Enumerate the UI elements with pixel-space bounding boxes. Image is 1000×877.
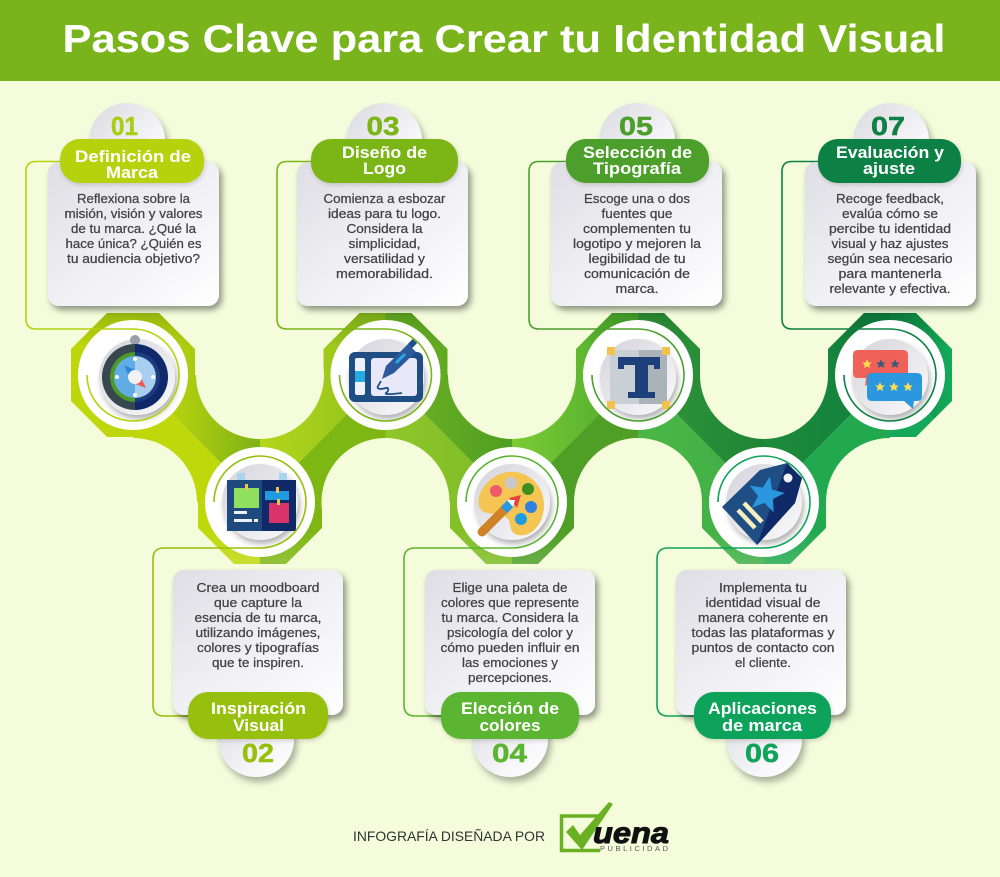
description text: Elige una paleta de (452, 581, 568, 595)
icon: rating chat bubbles (853, 350, 922, 409)
step title pill (566, 139, 709, 183)
number badge (173, 570, 343, 777)
step title pill (441, 692, 579, 739)
description text (64, 192, 202, 266)
description text: legibilidad de tu (588, 252, 686, 266)
description text: tu marca. Considera la (442, 611, 579, 625)
connector line (529, 162, 684, 421)
number badge: 06 (745, 740, 779, 768)
number badge (853, 103, 929, 179)
step title pill: ajuste (863, 160, 915, 178)
step title pill: Marca (106, 164, 159, 182)
description text: relevante y efectiva. (830, 282, 950, 296)
number badge: 02 (242, 740, 274, 768)
number badge (676, 570, 846, 777)
step title pill (188, 692, 328, 739)
step title pill: Tipografía (593, 160, 682, 178)
description text: memorabilidad. (336, 267, 433, 281)
description text: identidad visual de (706, 596, 821, 610)
logo: Buena Publicidad (562, 802, 669, 853)
description text: logotipo y mejoren la (573, 237, 701, 251)
step 03 (277, 103, 468, 430)
description text: visual y haz ajustes (832, 237, 948, 251)
description text: ideas para tu logo. (328, 207, 441, 221)
connector line (26, 162, 179, 421)
icon: brand tag (722, 463, 802, 545)
description text: comunicación de (584, 267, 690, 281)
card (676, 570, 846, 715)
description text: evalúa cómo se (842, 207, 938, 221)
connector line (277, 162, 432, 421)
card (805, 162, 976, 306)
description text (828, 192, 953, 296)
number badge (89, 103, 165, 179)
step 05 (529, 103, 722, 430)
step title pill (818, 139, 961, 183)
number badge (599, 103, 675, 179)
description text: versatilidad y (344, 252, 426, 266)
description text: manera coherente en (698, 611, 828, 625)
step title pill (60, 139, 204, 183)
step title pill: Visual (233, 717, 284, 735)
logo: Buena Publicidad: uena (593, 817, 669, 850)
description text (573, 192, 701, 296)
description text (440, 581, 580, 685)
connector line (404, 456, 558, 716)
number badge: 01 (111, 113, 138, 141)
description text (692, 581, 835, 670)
description text: Escoge una o dos (584, 192, 690, 206)
description text: para mantenerla (838, 267, 942, 281)
description text: tu audiencia objetivo? (67, 252, 200, 266)
icon: moodboard (227, 473, 296, 531)
number badge: 05 (619, 113, 653, 141)
description text (324, 192, 446, 281)
step title pill (311, 139, 458, 183)
connector line (782, 162, 936, 421)
description text: de tu marca. ¿Qué la (71, 222, 196, 236)
ribbon connecting the steps (60, 300, 960, 570)
description text: hace única? ¿Quién es (66, 237, 202, 251)
description text: percibe tu identidad (829, 222, 951, 236)
card (551, 162, 722, 306)
logo: Buena Publicidad: PUBLICIDAD (600, 844, 669, 853)
description text: complementen tu (583, 222, 691, 236)
icon: drawing tablet (349, 341, 423, 402)
description text: Recoge feedback, (836, 192, 944, 206)
description text: psicología del color y (447, 626, 574, 640)
number badge (346, 103, 422, 179)
description text: Considera la (346, 222, 423, 236)
description text: Reflexiona sobre la (77, 192, 190, 206)
step 01 (26, 103, 219, 430)
card (425, 570, 595, 715)
icon: typography T (607, 347, 670, 409)
card (48, 162, 219, 306)
card (173, 570, 343, 715)
step 06 (657, 447, 846, 777)
number badge: 03 (366, 113, 400, 141)
description text: esencia de tu marca, (194, 611, 322, 625)
description text: utilizando imágenes, (196, 626, 320, 640)
card (297, 162, 468, 306)
description text: según sea necesario (828, 252, 953, 266)
number badge: 07 (871, 113, 905, 141)
connector line (153, 456, 306, 716)
description text: colores que represente (441, 596, 579, 610)
description text: que te inspiren. (212, 656, 304, 670)
step title pill: Evaluación y (836, 144, 945, 162)
step title pill: Diseño de (342, 144, 427, 162)
step title pill: Definición de (75, 148, 191, 166)
description text: simplicidad, (348, 237, 420, 251)
step title pill (694, 692, 831, 739)
connector line (657, 456, 810, 716)
step title pill: de marca (722, 717, 803, 735)
icon: colour palette (478, 472, 544, 535)
description text: que capture la (214, 596, 302, 610)
description text: misión, visión y valores (64, 207, 202, 221)
description text: Comienza a esbozar (324, 192, 446, 206)
icon: compass (102, 335, 168, 410)
number badge: 04 (492, 740, 528, 768)
description text: fuentes que (602, 207, 673, 221)
description text (194, 581, 322, 670)
footer credit (353, 802, 669, 853)
description text: puntos de contacto con (692, 641, 835, 655)
description text: Implementa tu (719, 581, 807, 595)
step 02 (153, 447, 343, 777)
description text: el cliente. (735, 656, 791, 670)
header band (0, 0, 1000, 81)
description text: Crea un moodboard (196, 581, 320, 595)
step title pill: Aplicaciones (708, 700, 817, 718)
step title pill: Logo (363, 160, 406, 178)
step 07 (782, 103, 976, 430)
step 04 (404, 447, 595, 777)
step title pill: Elección de (461, 700, 559, 718)
description text: las emociones y (462, 656, 559, 670)
step title pill: Selección de (583, 144, 692, 162)
description text: colores y tipografías (197, 641, 319, 655)
step title pill: colores (480, 717, 540, 735)
description text: cómo pueden influir en (440, 641, 580, 655)
step title pill: Inspiración (211, 700, 306, 718)
number badge (425, 570, 595, 777)
title: Pasos Clave para Crear tu Identidad Visual (62, 18, 946, 61)
description text: todas las plataformas y (692, 626, 835, 640)
description text: percepciones. (468, 671, 552, 685)
footer credit: INFOGRAFÍA DISEÑADA POR (353, 828, 545, 844)
description text: marca. (616, 282, 658, 296)
